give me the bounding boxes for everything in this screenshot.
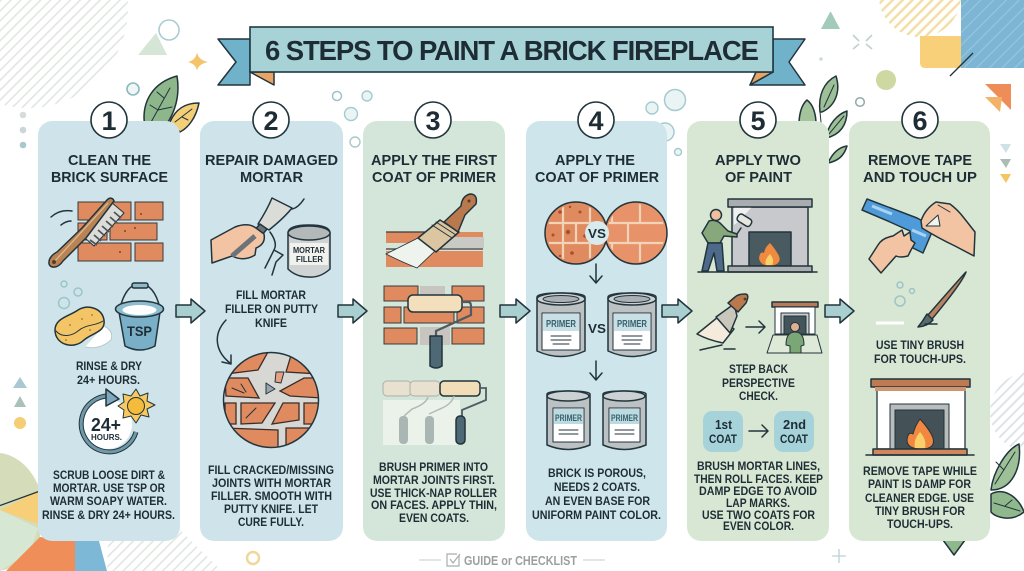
banner left tail	[218, 39, 250, 85]
caption: rinse and dry: RINSE & DRY	[76, 361, 142, 373]
caption: step back check	[722, 364, 795, 403]
icon: circular cracked mortar closeup	[224, 352, 322, 450]
body text: JOINTS WITH MORTAR	[212, 478, 332, 490]
heading: REPAIR DAMAGED	[205, 152, 338, 169]
heading: APPLY TWO	[715, 152, 801, 169]
panel: step 5 apply two of paint	[687, 102, 829, 541]
background decoration: top-left stripes and shapes	[0, 0, 208, 148]
background decoration: step 1 leaves	[144, 76, 199, 132]
banner body	[250, 27, 773, 72]
body text: BRUSH MORTAR LINES,	[697, 461, 820, 473]
body text	[208, 465, 334, 529]
body text	[694, 461, 823, 533]
body text: MORTAR. USE TSP OR	[53, 483, 166, 495]
body text: USE THICK-NAP ROLLER	[370, 488, 498, 500]
callout: first coat to second coat: 2nd	[783, 418, 806, 432]
step number 1: 1	[101, 106, 117, 136]
arrow: step 3 to 4	[500, 299, 530, 323]
caption: use tiny brush	[874, 340, 966, 366]
panel: step 4 apply the coat of primer	[526, 102, 670, 541]
panel: step 6 remove tape and touch up	[849, 102, 990, 541]
panel: step 2 repair damaged mortar	[200, 102, 343, 541]
banner right fold	[750, 72, 773, 85]
heading: BRICK SURFACE	[51, 169, 168, 186]
icon: hand with putty knife and mortar filler can: FILLER	[296, 255, 323, 264]
arrow: step 5 to 6	[825, 299, 854, 323]
heading: OF PAINT	[725, 169, 792, 186]
heading	[715, 152, 801, 186]
body text: TINY BRUSH FOR	[875, 506, 966, 518]
heading: APPLY THE FIRST	[371, 152, 497, 169]
heading	[205, 152, 338, 186]
step number 5	[740, 102, 776, 138]
caption: use tiny brush: USE TINY BRUSH	[876, 340, 964, 352]
step number 6: 6	[912, 106, 928, 136]
panel: step 3 apply the first coat of primer	[363, 102, 505, 541]
background decoration: step 5 leaf sprig	[799, 76, 847, 163]
arrow: step 1 to 2	[176, 299, 205, 323]
body text: AN EVEN BASE FOR	[545, 496, 651, 508]
body text: FILL CRACKED/MISSING	[208, 465, 334, 477]
body text: NEEDS 2 COATS.	[554, 482, 640, 494]
background decoration: right side stripes and leaves	[832, 372, 1024, 563]
icon: two primer cans	[547, 391, 646, 450]
background decoration: top-right color blocks	[819, 0, 1024, 183]
step number 2	[253, 102, 289, 138]
body text: LAP MARKS.	[726, 498, 790, 510]
icon: hand with putty knife and mortar filler can: MORTAR	[293, 246, 325, 255]
body text	[532, 468, 661, 522]
body text: EVEN COATS.	[399, 513, 469, 525]
icon: primer cans versus: VS	[588, 321, 606, 336]
body text	[42, 470, 175, 522]
body text: CLEANER EDGE. USE	[865, 493, 974, 505]
heading: COAT OF PRIMER	[535, 169, 659, 186]
panel: step 1 clean the brick surface	[38, 102, 180, 541]
banner left fold	[250, 72, 274, 85]
icon: finished white fireplace	[866, 379, 974, 455]
icon: two primer cans: PRIMER	[555, 413, 582, 423]
caption: use tiny brush: FOR TOUCH-UPS.	[874, 354, 966, 366]
icon: primer cans versus: PRIMER	[546, 319, 577, 330]
body text: TOUCH-UPS.	[887, 519, 953, 531]
icon: two primer cans: PRIMER	[611, 413, 638, 423]
icon: wire brush on bricks	[49, 198, 163, 267]
icon: 24+ hours timer with sun	[81, 389, 155, 452]
caption: rinse and dry	[76, 361, 142, 387]
heading	[863, 152, 977, 186]
caption: fill mortar filler: FILLER ON PUTTY	[225, 304, 318, 316]
background decoration: left-bottom color blocks	[0, 377, 259, 571]
icon: three fading rollers	[383, 381, 486, 445]
title text: 6 STEPS TO PAINT A BRICK FIREPLACE	[265, 35, 759, 66]
heading: CLEAN THE	[68, 152, 151, 169]
caption: step back check: STEP BACK	[729, 364, 789, 376]
arrow: step 2 to 3	[338, 299, 367, 323]
icon: person painting fireplace	[698, 199, 817, 272]
body text: MORTAR JOINTS FIRST.	[373, 475, 495, 487]
body text: PAINT IS DAMP FOR	[868, 479, 972, 491]
body text: UNIFORM PAINT COLOR.	[532, 510, 661, 522]
body text: FILLER. SMOOTH WITH	[211, 491, 332, 503]
icon: sponge, bubbles and TSP bucket	[55, 281, 164, 350]
body text: REMOVE TAPE WHILE	[863, 466, 977, 478]
body text: WARM SOAPY WATER.	[50, 496, 167, 508]
caption: fill mortar filler: KNIFE	[255, 318, 287, 330]
arrow: down	[590, 264, 602, 283]
body text: CURE FULLY.	[238, 517, 304, 529]
callout: first coat to second coat: 1st	[715, 418, 733, 432]
heading: MORTAR	[240, 169, 303, 186]
heading: APPLY THE	[555, 152, 635, 169]
arrow: down	[590, 361, 602, 380]
caption: step back check: CHECK.	[739, 391, 778, 403]
body text	[370, 462, 498, 525]
icon: paint brush on brick strip	[386, 194, 484, 268]
body text: RINSE & DRY 24+ HOURS.	[42, 510, 175, 522]
body text: THEN ROLL FACES. KEEP	[694, 474, 823, 486]
step number 6	[902, 102, 938, 138]
icon: primer cans versus: PRIMER	[617, 319, 648, 330]
heading	[51, 152, 168, 186]
body text: DAMP EDGE TO AVOID	[699, 486, 817, 498]
step number 3: 3	[425, 106, 441, 136]
body text: USE TWO COATS FOR	[702, 510, 816, 522]
body text: PUTTY KNIFE. LET	[224, 504, 318, 516]
icon: hand with putty knife and mortar filler can	[211, 198, 330, 277]
icon: tiny brush with bubbles	[876, 272, 966, 327]
icon: 24+ hours timer with sun: 24+	[91, 415, 121, 435]
step number 4	[578, 102, 614, 138]
footer: guide or checklist: GUIDE or CHECKLIST	[464, 554, 577, 568]
icon: sponge, bubbles and TSP bucket: TSP	[127, 323, 152, 339]
heading	[371, 152, 497, 186]
body text: BRUSH PRIMER INTO	[379, 462, 488, 474]
callout: first coat to second coat	[703, 411, 814, 452]
heading: REMOVE TAPE	[868, 152, 972, 169]
title banner	[218, 27, 805, 85]
heading	[535, 152, 659, 186]
background decoration: bubbles between panels	[332, 90, 686, 156]
heading: AND TOUCH UP	[863, 169, 977, 186]
step number 3	[415, 102, 451, 138]
body text: ON FACES. APPLY THIN,	[371, 500, 497, 512]
step number 4: 4	[588, 106, 604, 136]
icon: 24+ hours timer with sun: HOURS.	[91, 433, 122, 442]
arrow: step 4 to 5	[662, 299, 692, 323]
caption: step back check: PERSPECTIVE	[722, 378, 795, 390]
icon: rough versus smooth brick circles: VS	[588, 226, 606, 241]
banner right tail	[750, 39, 805, 85]
icon: hands peeling blue tape	[862, 199, 975, 273]
caption: fill mortar filler: FILL MORTAR	[236, 290, 307, 302]
body text	[863, 466, 977, 531]
step number 1	[91, 102, 127, 138]
callout: first coat to second coat: COAT	[709, 432, 738, 446]
body text: SCRUB LOOSE DIRT &	[53, 470, 165, 482]
icon: brush arrow step-back check	[697, 294, 822, 353]
step number 2: 2	[263, 106, 279, 136]
icon: primer cans versus	[537, 293, 656, 356]
body text: EVEN COLOR.	[723, 521, 794, 533]
step number 5: 5	[750, 106, 766, 136]
heading: COAT OF PRIMER	[372, 169, 496, 186]
icon: rough versus smooth brick circles	[545, 202, 670, 265]
icon: roller on brick wall	[384, 286, 484, 368]
body text: BRICK IS POROUS,	[548, 468, 646, 480]
callout: first coat to second coat: COAT	[780, 432, 809, 446]
arrow: curved down to brick detail	[217, 320, 231, 364]
caption: rinse and dry: 24+ HOURS.	[77, 375, 140, 387]
caption: fill mortar filler	[225, 290, 318, 330]
